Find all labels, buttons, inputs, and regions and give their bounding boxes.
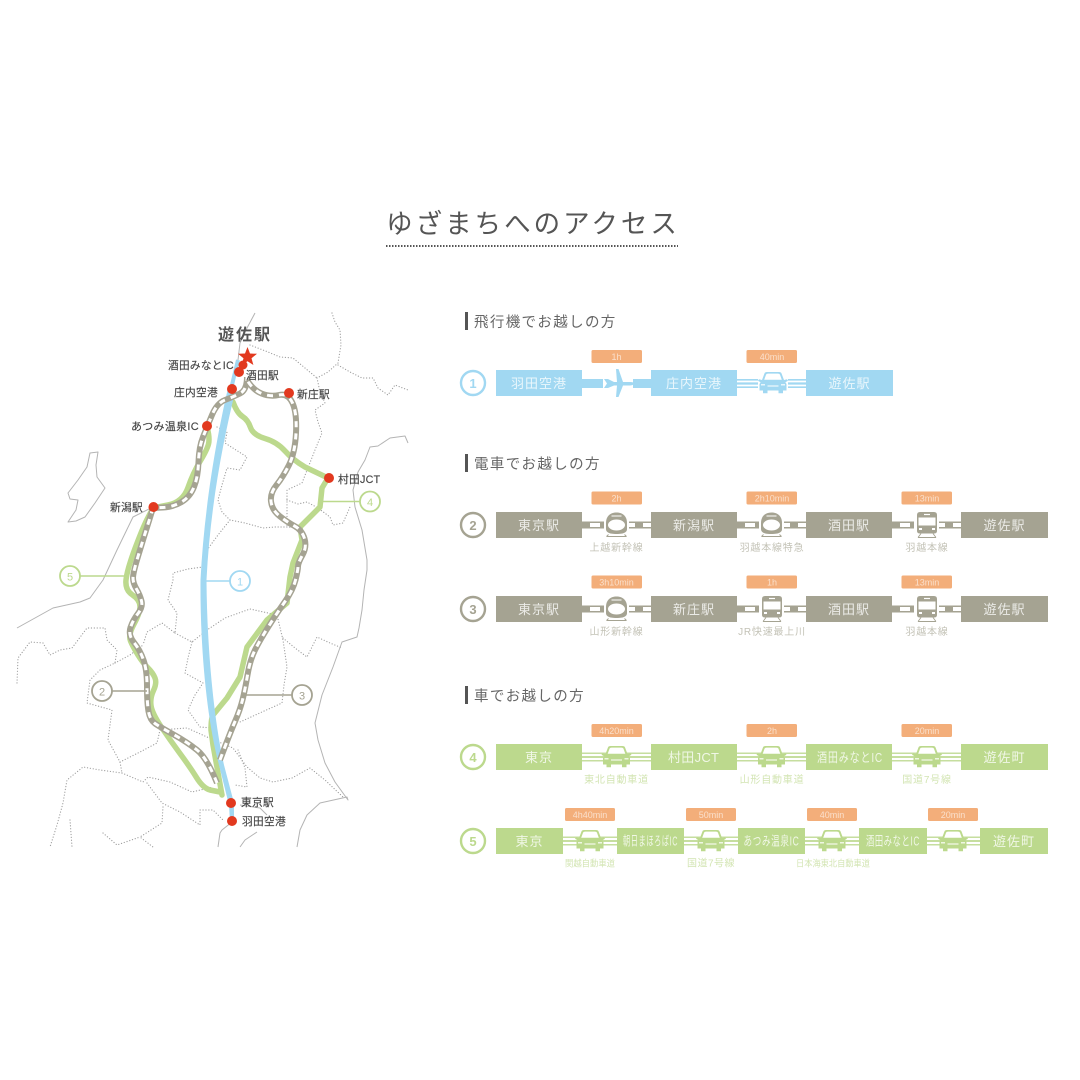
route 3 row: 3h10min [599, 578, 634, 588]
route 5 row: 遊佐町 [993, 834, 1035, 849]
icon: destination star [238, 347, 257, 365]
route 3 row: 山形新幹線 [590, 625, 644, 638]
route 5 row: 東京 [515, 834, 544, 849]
route 4 row: 山形自動車道 [740, 773, 804, 786]
route 3 row: 1h [767, 578, 777, 588]
route 4 row: 村田JCT [668, 750, 720, 765]
panel: by plane [461, 312, 893, 397]
title: ゆざまちへのアクセス [386, 209, 680, 239]
heading: by car: 車でお越しの方 [474, 688, 585, 705]
route 2 row: 羽越本線特急 [740, 541, 804, 554]
icon: car [817, 830, 847, 851]
route number callout 2: 2 [99, 686, 105, 698]
route 5 row: 関越自動車道 [565, 858, 615, 868]
route 5 row: 20min [941, 810, 965, 820]
route 3 row: 東京駅 [518, 602, 560, 617]
route 5 row: 酒田みなとIC [866, 834, 920, 848]
route 2 row: 2h10min [755, 494, 789, 504]
route number callout 2 [92, 681, 147, 701]
icon: shinkansen [606, 596, 627, 620]
route number callout 4 [322, 492, 380, 512]
route 2 row: 上越新幹線 [590, 541, 644, 554]
route 4 row: 4h20min [599, 726, 634, 736]
route 3 row: 遊佐駅 [983, 602, 1026, 617]
route 5 row: 日本海東北自動車道 [796, 858, 870, 868]
route 2 rail line [130, 377, 247, 783]
icon: car [602, 746, 632, 767]
route number callout 3 [245, 685, 312, 705]
place labels: 酒田駅 [246, 369, 279, 382]
station dots [148, 360, 334, 826]
place labels: 酒田みなとIC [168, 359, 234, 372]
icon: limited express [761, 512, 782, 536]
route number callout 4: 4 [367, 497, 373, 509]
place labels: 庄内空港 [174, 386, 218, 399]
route 1 blue air line [200, 388, 236, 822]
route 4 row: 遊佐町 [983, 750, 1026, 765]
route 5 row: 50min [699, 810, 723, 820]
icon: car [575, 830, 605, 851]
route 1 row [461, 350, 893, 397]
route 3 row: JR快速最上川 [738, 626, 806, 638]
route number callout 1 [205, 571, 250, 591]
place labels: 東京駅 [241, 796, 274, 809]
route 2 row: 東京駅 [518, 518, 560, 533]
route 2 row [461, 492, 1048, 554]
route 2 row: 2 [469, 518, 477, 533]
route 1 row: 1h [611, 352, 622, 362]
route 4 row: 酒田みなとIC [817, 750, 883, 765]
heading: by plane: 飛行機でお越しの方 [474, 314, 617, 331]
route 1 row: 40min [760, 352, 784, 362]
route 3 row: 羽越本線 [905, 625, 949, 638]
panel: by train [461, 454, 1048, 638]
icon: car [756, 746, 786, 767]
icon: car [696, 830, 726, 851]
place labels: 村田JCT [338, 473, 381, 486]
title dotted underline [386, 245, 678, 247]
route 2 row: 羽越本線 [905, 541, 949, 554]
icon: rapid train [762, 596, 782, 622]
route 4 row: 東京 [525, 750, 553, 765]
route 1 row: 1 [469, 376, 477, 391]
icon: plane [604, 369, 634, 397]
route 4 row: 国道7号線 [902, 773, 952, 786]
route 3 row: 3 [469, 602, 477, 617]
route 4 row: 20min [915, 726, 939, 736]
icon: train [917, 512, 937, 538]
route 3 row: 新庄駅 [673, 602, 715, 617]
place labels: 羽田空港 [242, 816, 286, 828]
heading: by train: 電車でお越しの方 [474, 456, 601, 473]
route 4 row: 東北自動車道 [584, 773, 649, 786]
icon: car [938, 830, 968, 851]
route 2 row: 遊佐駅 [983, 518, 1026, 533]
route 5 row [461, 808, 1048, 870]
destination label: 遊佐駅 [218, 325, 272, 344]
route 5 row: 4h40min [573, 810, 607, 820]
route number callout 5: 5 [67, 572, 73, 584]
route 5 row: 40min [820, 810, 844, 820]
route number callout 3: 3 [299, 690, 305, 702]
route 4 row [461, 724, 1048, 786]
prefecture borders [17, 313, 408, 847]
icon: train [917, 596, 937, 622]
place labels [110, 359, 381, 828]
route 1 row: 羽田空港 [511, 376, 567, 391]
place labels: 新庄駅 [297, 389, 330, 401]
route 3 row [461, 576, 1048, 638]
map of routes [17, 313, 408, 847]
icon: car [758, 372, 788, 393]
route 2 row: 酒田駅 [828, 518, 870, 533]
route 5 row: あつみ温泉IC [744, 834, 800, 848]
panel: by car [461, 686, 1048, 870]
route 1 row: 遊佐駅 [828, 376, 871, 391]
route number callout 1: 1 [237, 576, 243, 588]
route 3 rail line [220, 380, 305, 760]
coastlines [17, 313, 408, 847]
icon: shinkansen [606, 512, 627, 536]
route 5 row: 朝日まほろばIC [623, 834, 678, 848]
route 2 row: 新潟駅 [673, 518, 715, 533]
icon: car [912, 746, 942, 767]
route 5 row: 5 [469, 834, 477, 849]
route 3 row: 酒田駅 [828, 602, 870, 617]
route 4 row: 4 [469, 750, 477, 765]
route 1 row: 庄内空港 [666, 376, 722, 391]
place labels: あつみ温泉IC [131, 420, 199, 433]
place labels: 新潟駅 [110, 501, 143, 514]
route 5 row: 国道7号線 [687, 856, 735, 870]
route 5 green expressway [126, 427, 220, 792]
route 4 row: 2h [767, 726, 777, 736]
route number callout 5 [60, 566, 127, 586]
route 2 row: 13min [915, 494, 939, 504]
route 3 row: 13min [915, 578, 939, 588]
route 4 green expressway [211, 402, 328, 795]
route 2 row: 2h [611, 494, 622, 504]
